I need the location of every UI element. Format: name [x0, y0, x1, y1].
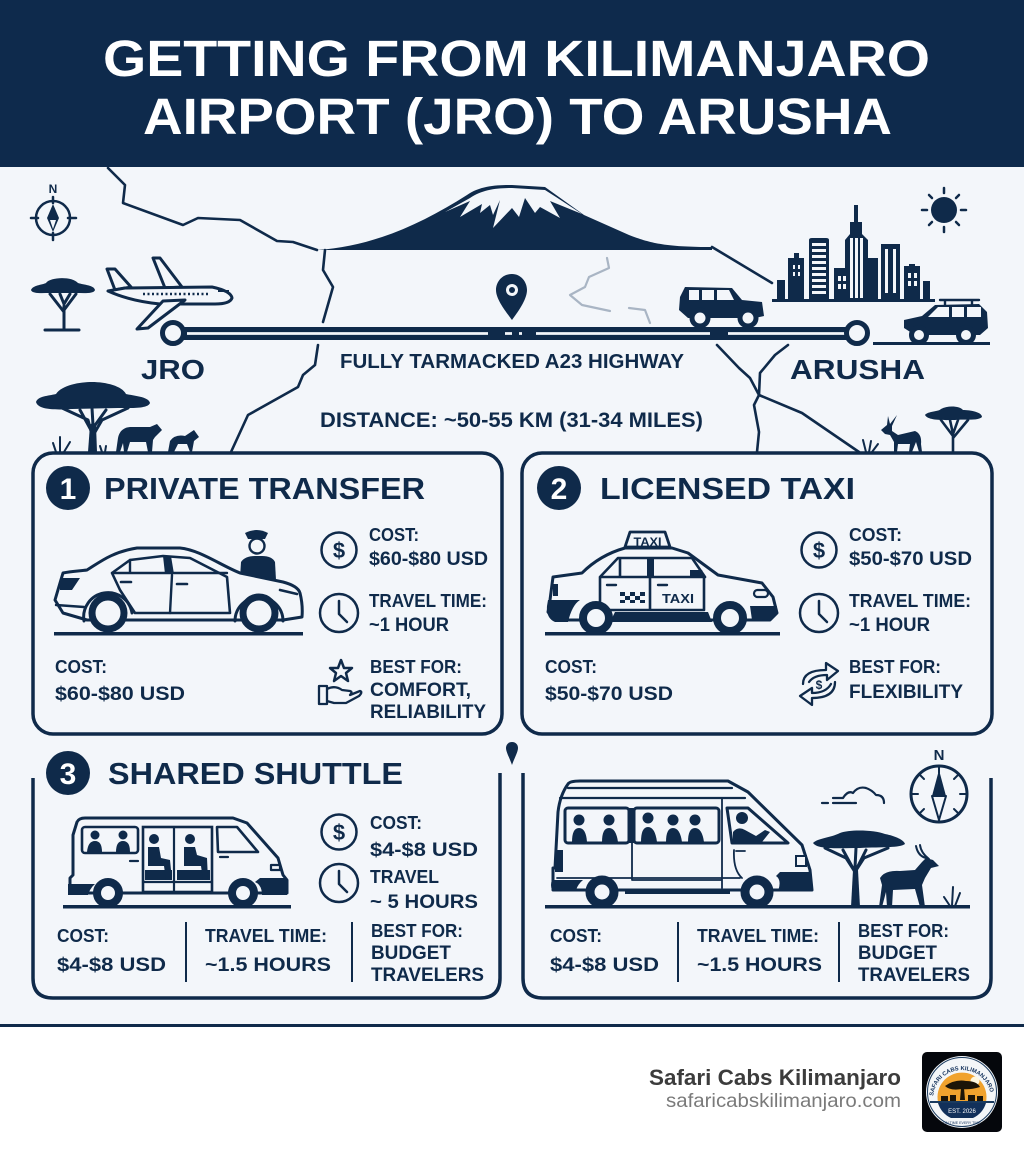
- illustration: shuttle van with passengers: [63, 818, 291, 908]
- icon: dollar: $: [813, 538, 825, 563]
- illustration: taxi: [545, 532, 780, 636]
- bottom stats row: BEST FOR:: [858, 921, 949, 941]
- panel: shuttle detail: [523, 747, 991, 998]
- badge number 1: 1: [60, 473, 76, 506]
- footer: [0, 1024, 1024, 1154]
- bottom cost text: COST:: [55, 657, 107, 677]
- cost text: $4-$8 USD: [370, 840, 478, 861]
- heading: licensed taxi: LICENSED TAXI: [600, 471, 855, 506]
- ground line: [545, 905, 970, 908]
- bottom stats row: COST:: [57, 926, 109, 946]
- icon: dollar: [322, 532, 356, 568]
- icon: exchange arrows: [800, 663, 838, 705]
- best for text: FLEXIBILITY: [849, 682, 963, 703]
- bottom stats row: $4-$8 USD: [550, 955, 659, 976]
- panel: shared shuttle: [33, 751, 500, 998]
- logo badge: EST. 2026: [948, 1109, 977, 1115]
- icon: clock: [320, 594, 358, 632]
- label: distance: DISTANCE: ~50-55 KM (31-34 MILES): [320, 408, 703, 432]
- map region boundary lines: [108, 168, 859, 452]
- icon: location pin: [496, 274, 527, 320]
- logo badge: [922, 1052, 1002, 1132]
- header banner with title: GETTING FROM KILIMANJARO: [103, 30, 930, 87]
- bottom cost text: $60-$80 USD: [55, 684, 185, 705]
- icon: airplane: [107, 258, 232, 329]
- icon: compass top left: [31, 182, 76, 240]
- icon: clock: [800, 594, 838, 632]
- illustration: large acacia and wildlife: [36, 382, 199, 452]
- highway road line: [162, 322, 868, 344]
- bottom cost text: COST:: [545, 657, 597, 677]
- icon: compass top left: N: [49, 182, 57, 196]
- illustration: antelope and acacia right: [863, 406, 982, 452]
- best for text: COMFORT,: [370, 680, 471, 701]
- illustration: taxi: TAXI: [662, 591, 694, 606]
- icon: acacia tree small: [31, 278, 95, 330]
- bottom stats row: COST:: [550, 926, 602, 946]
- bottom stats row: $4-$8 USD: [57, 955, 166, 976]
- icon: sun: [922, 188, 966, 232]
- heading: shared shuttle: SHARED SHUTTLE: [108, 756, 403, 791]
- cost text: COST:: [370, 813, 422, 833]
- cost text: $50-$70 USD: [849, 549, 972, 570]
- best for text: BEST FOR:: [849, 657, 941, 677]
- bottom cost text: $50-$70 USD: [545, 684, 673, 705]
- badge number 3: 3: [60, 758, 76, 791]
- panel: private transfer: [33, 453, 502, 734]
- icon: dollar: $: [333, 820, 345, 845]
- travel time text: ~1 HOUR: [849, 615, 930, 636]
- bottom stats row: BUDGET: [858, 943, 937, 964]
- header banner with title: [0, 0, 1024, 167]
- badge number 2: [537, 466, 581, 510]
- brand name and site: Safari Cabs Kilimanjaro: [649, 1065, 901, 1090]
- logo badge: ON TIME EVERY TIME: [943, 1121, 981, 1125]
- badge number 3: [46, 751, 90, 795]
- bottom stats row: [550, 921, 970, 986]
- bottom stats row: TRAVEL TIME:: [697, 926, 819, 946]
- illustration: acacia tree: [813, 830, 905, 907]
- icon: jeep on road: [679, 287, 764, 326]
- badge number 1: [46, 466, 90, 510]
- best for text: BEST FOR:: [370, 657, 462, 677]
- cost text: [849, 525, 972, 570]
- bottom stats row: BUDGET: [371, 943, 451, 964]
- travel text: ~ 5 HOURS: [370, 892, 478, 913]
- bottom cost text: [545, 657, 673, 705]
- bottom stats row: TRAVELERS: [858, 965, 970, 986]
- travel time text: [369, 591, 487, 636]
- illustration: taxi: TAXI: [634, 537, 662, 549]
- heading: private transfer: PRIVATE TRANSFER: [104, 471, 425, 506]
- cost text: COST:: [849, 525, 902, 545]
- travel time text: TRAVEL TIME:: [369, 591, 487, 611]
- icon: dollar: [802, 532, 836, 568]
- travel text: TRAVEL: [370, 867, 439, 887]
- bottom cost text: [55, 657, 185, 705]
- label: JRO: JRO: [141, 354, 205, 385]
- icon: compass: [911, 747, 967, 822]
- cost text: $60-$80 USD: [369, 549, 488, 570]
- icon: dollar: $: [333, 538, 345, 563]
- travel text: [370, 867, 478, 913]
- illustration: sedan with chauffeur: [54, 530, 303, 636]
- travel time text: [849, 591, 971, 636]
- label: Arusha: ARUSHA: [790, 354, 925, 385]
- illustration: antelope: [879, 845, 960, 907]
- icon: compass: N: [934, 747, 944, 764]
- bottom stats row: ~1.5 HOURS: [205, 955, 331, 976]
- brand name and site: safaricabskilimanjaro.com: [666, 1090, 901, 1112]
- badge number 2: 2: [551, 473, 567, 506]
- travel time text: ~1 HOUR: [369, 615, 449, 636]
- best for text: [849, 657, 963, 703]
- icon: exchange arrows: $: [816, 678, 823, 692]
- cost text: [369, 525, 488, 570]
- cost text: [370, 813, 478, 861]
- bottom stats row: TRAVELERS: [371, 965, 484, 986]
- icon: cloud: [822, 788, 884, 803]
- illustration: Arusha city skyline: [772, 205, 935, 302]
- bottom stats row: ~1.5 HOURS: [697, 955, 822, 976]
- illustration: Mount Kilimanjaro: [317, 185, 712, 250]
- panel: licensed taxi: [522, 453, 992, 734]
- logo badge: SAFARI CABS KILIMANJARO: [929, 1066, 994, 1096]
- label: highway note: FULLY TARMACKED A23 HIGHWAY: [340, 351, 685, 373]
- travel time text: TRAVEL TIME:: [849, 591, 971, 611]
- river scribble: [570, 258, 650, 323]
- best for text: [370, 657, 486, 723]
- best for text: RELIABILITY: [370, 702, 486, 723]
- icon: hand with star: [319, 660, 361, 704]
- icon: small pin between panels: [506, 742, 518, 765]
- icon: jeep with roof rack: [873, 300, 990, 345]
- bottom stats row: TRAVEL TIME:: [205, 926, 327, 946]
- brand name and site: [649, 1065, 901, 1112]
- header banner with title: AIRPORT (JRO) TO ARUSHA: [143, 88, 892, 145]
- bottom stats row: BEST FOR:: [371, 921, 463, 941]
- illustration: large shuttle van: [551, 781, 812, 904]
- icon: clock: [320, 864, 358, 902]
- icon: dollar: [322, 814, 356, 850]
- cost text: COST:: [369, 525, 419, 545]
- bottom stats row: [57, 921, 484, 986]
